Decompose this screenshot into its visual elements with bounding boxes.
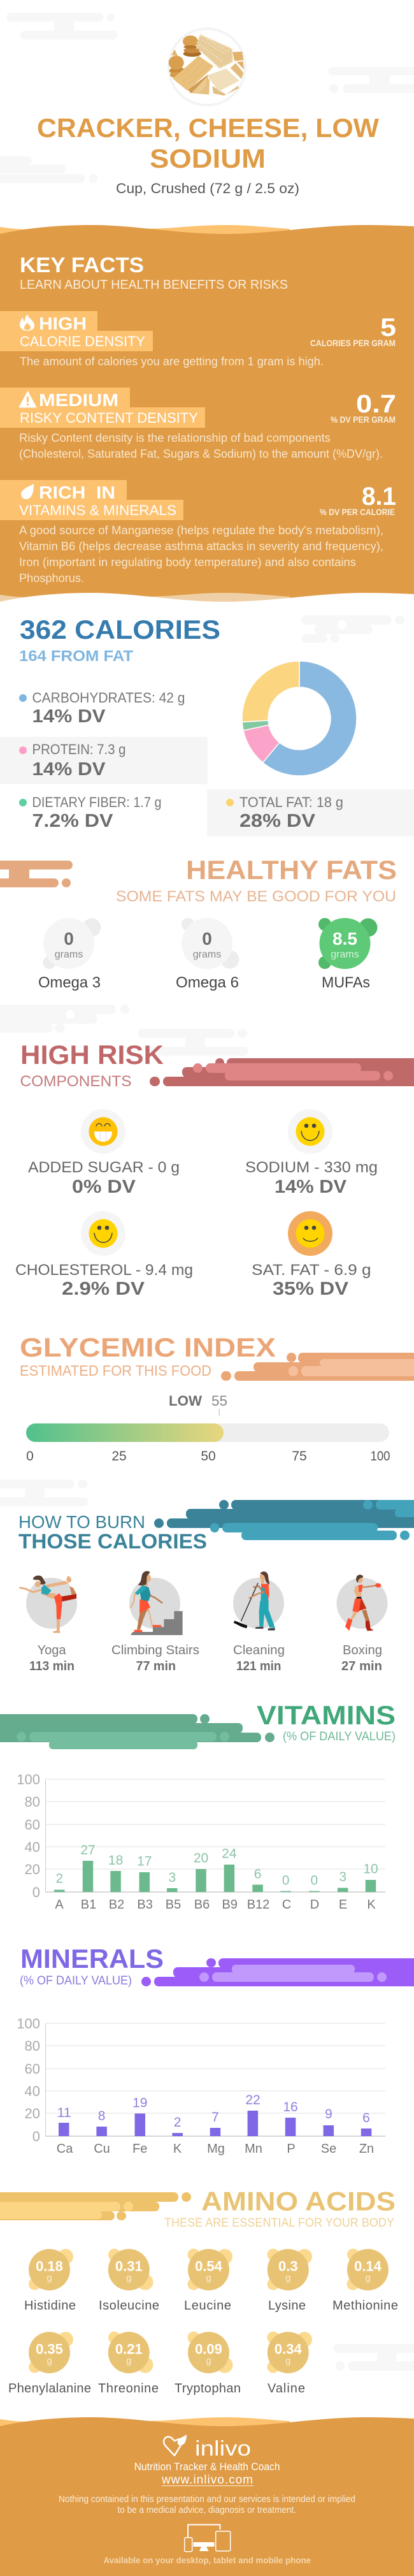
disclaimer — [59, 2494, 355, 2515]
subheading: essential: THESE ARE ESSENTIAL FOR YOUR BODY — [164, 2216, 394, 2230]
risk item: sodium: 14% DV — [275, 1177, 347, 1197]
risk item: cholesterol: 2.9% DV — [62, 1279, 145, 1299]
icon: boxer figure — [345, 1575, 381, 1631]
bar chart: minerals: 6 — [362, 2111, 370, 2125]
bar chart: minerals: 9 — [325, 2107, 332, 2121]
bar chart: vitamins: 2 — [55, 1872, 63, 1886]
amino: tryptophan — [175, 2332, 241, 2396]
bar chart: minerals: 0 — [32, 2128, 40, 2144]
legend: total fat: 28% DV — [239, 811, 316, 831]
legend: total fat: TOTAL FAT: 18 g — [239, 794, 343, 810]
bar chart: vitamins: 0 — [32, 1884, 40, 1900]
panel: vitamins — [0, 1700, 396, 1912]
risk item: sodium: SODIUM - 330 mg — [245, 1159, 378, 1176]
amino: methionine — [332, 2249, 398, 2313]
risk item: added sugar: ADDED SUGAR - 0 g — [28, 1159, 180, 1176]
metric: omega 6: Omega 6 — [176, 974, 239, 991]
legend: protein: 14% DV — [32, 759, 106, 780]
bar chart: minerals: 80 — [25, 2038, 40, 2054]
fact: vitamins and minerals: 8.1 — [362, 483, 396, 511]
tagline: Nutrition Tracker & Health Coach — [134, 2461, 280, 2473]
bar chart: vitamins: 6 — [254, 1867, 261, 1881]
bar chart: vitamins — [17, 1772, 385, 1912]
activity: cleaning: Cleaning — [233, 1643, 285, 1657]
activity: climbing stairs: Climbing Stairs — [111, 1643, 199, 1657]
metric: omega 6: 0 — [202, 929, 212, 949]
disclaimer: to be a medical advice, diagnosis or treatment. — [117, 2505, 296, 2515]
fact: calorie density: 5 — [380, 314, 396, 342]
bar chart: minerals: Mn — [245, 2142, 262, 2156]
panel: glycemic index — [20, 1332, 414, 1464]
activity: cleaning: 121 min — [236, 1659, 282, 1673]
subheading: from fat: 164 FROM FAT — [19, 648, 133, 665]
fact: vitamins and minerals: Vitamin B6 (helps decrease asthma attacks in severity and frequency), — [19, 540, 383, 553]
fact: calorie density: The amount of calories you are getting from 1 gram is high. — [20, 355, 324, 368]
bar chart: minerals: 8 — [98, 2109, 105, 2123]
bar chart: minerals: K — [173, 2142, 182, 2156]
activity: yoga: 113 min — [29, 1659, 75, 1673]
bar chart: vitamins: 20 — [194, 1851, 208, 1866]
amino: leucine — [184, 2249, 232, 2313]
title: SODIUM — [150, 143, 266, 173]
panel: calories — [0, 615, 414, 836]
fact: calorie density: CALORIE DENSITY — [20, 333, 145, 349]
amino: methionine: Methionine — [332, 2299, 398, 2313]
logo: inlivo: inlivo — [195, 2436, 251, 2460]
fact: risky content density: % DV PER GRAM — [331, 414, 396, 425]
risk item: saturated fat: SAT. FAT - 6.9 g — [252, 1262, 371, 1279]
bar chart: vitamins: B3 — [137, 1898, 153, 1912]
activity: boxing — [336, 1575, 387, 1673]
gauge axis labels: 100 — [371, 1449, 390, 1464]
banner: healthy fats stripes — [0, 861, 73, 887]
fact: risky content density: Risky Content density is the relationship of bad components — [19, 432, 331, 444]
fact: calorie density: HIGH — [39, 314, 87, 333]
icon: yoga figure — [20, 1576, 77, 1633]
amino: isoleucine: Isoleucine — [99, 2299, 159, 2313]
bar chart: vitamins: B6 — [194, 1898, 210, 1912]
banner: amino stripes — [0, 2192, 191, 2220]
fact: risky content density: 0.7 — [356, 390, 396, 418]
fact: vitamins and minerals — [0, 480, 396, 585]
amino: threonine: Threonine — [98, 2382, 159, 2396]
logo: inlivo — [164, 2434, 251, 2460]
bar chart: vitamins: 3 — [339, 1870, 346, 1884]
title: CRACKER, CHEESE, LOW — [37, 113, 379, 143]
bar chart: vitamins: 0 — [282, 1873, 289, 1888]
bar chart: minerals: 11 — [57, 2106, 71, 2120]
bar chart: minerals: 20 — [25, 2106, 40, 2121]
activity: boxing: 27 min — [341, 1659, 382, 1673]
fact: vitamins and minerals: A good source of Manganese (helps regulate the body's metabolism), — [19, 524, 383, 537]
bar chart: minerals — [17, 2016, 385, 2156]
legend: total fat — [226, 794, 343, 831]
gauge value: 55 — [211, 1393, 227, 1409]
bar chart: vitamins: 27 — [80, 1843, 96, 1858]
bar chart: minerals: 40 — [25, 2083, 40, 2099]
activity: yoga — [20, 1576, 77, 1673]
amino: histidine: g — [46, 2273, 52, 2283]
legend: dietary fiber: DIETARY FIBER: 1.7 g — [32, 794, 162, 810]
heading: amino acids: AMINO ACIDS — [201, 2187, 396, 2216]
activity: climbing stairs: 77 min — [136, 1659, 176, 1673]
banner: glycemic stripes — [221, 1353, 414, 1381]
metric: omega 3: grams — [55, 949, 83, 960]
bar chart: vitamins: 100 — [17, 1772, 40, 1787]
heading: how to burn: HOW TO BURN — [18, 1512, 145, 1532]
metric: omega 3: 0 — [64, 929, 74, 949]
gauge bar — [26, 1423, 389, 1442]
panel: minerals — [17, 1944, 414, 2156]
metric: MUFAs: grams — [331, 949, 359, 960]
metric: omega 6 — [176, 918, 239, 991]
bar chart: vitamins: B2 — [109, 1898, 124, 1912]
amino: threonine — [98, 2332, 159, 2396]
amino: lysine: 0.3 — [278, 2258, 298, 2274]
gauge axis labels: 25 — [111, 1449, 127, 1464]
heading: glycemic index: GLYCEMIC INDEX — [20, 1332, 276, 1362]
amino: valine: Valine — [268, 2382, 305, 2396]
banner: vitamins stripes — [0, 1714, 275, 1749]
legend: protein: PROTEIN: 7.3 g — [32, 741, 126, 757]
amino: leucine: Leucine — [184, 2299, 231, 2313]
bar chart: minerals: 7 — [211, 2110, 219, 2125]
amino: phenylalanine: g — [46, 2355, 52, 2366]
bar chart: minerals: Zn — [359, 2142, 374, 2156]
icon: flame — [20, 314, 34, 331]
bar chart: minerals: 60 — [25, 2061, 40, 2077]
bar chart: minerals: Se — [321, 2142, 336, 2156]
amino: histidine: Histidine — [24, 2299, 76, 2313]
subheading: percent daily value: (% OF DAILY VALUE) — [20, 1974, 132, 1988]
risk item: sodium — [245, 1109, 378, 1197]
icon: leaf — [21, 484, 34, 499]
legend: dietary fiber: 7.2% DV — [32, 811, 113, 831]
amino: leucine: g — [206, 2273, 211, 2283]
amino: threonine: g — [126, 2355, 131, 2366]
bar chart: vitamins: 18 — [108, 1853, 123, 1868]
heading: vitamins: VITAMINS — [257, 1700, 396, 1730]
risk item: saturated fat: 35% DV — [273, 1279, 349, 1299]
icon: stairs figure — [131, 1571, 183, 1635]
bar chart: vitamins: B5 — [166, 1898, 181, 1912]
amino: methionine: g — [365, 2273, 371, 2283]
bar chart: minerals: Fe — [132, 2142, 147, 2156]
bar chart: vitamins: E — [339, 1898, 347, 1912]
fact: risky content density: MEDIUM — [39, 390, 118, 410]
banner: teal stripes — [154, 1500, 414, 1540]
amino: tryptophan: Tryptophan — [175, 2382, 241, 2396]
bar chart: vitamins: B12 — [247, 1898, 269, 1912]
bar chart: vitamins: 40 — [25, 1839, 40, 1855]
subheading: healthy fats: SOME FATS MAY BE GOOD FOR YOU — [116, 888, 396, 905]
subheading: LEARN ABOUT HEALTH BENEFITS OR RISKS — [20, 278, 288, 292]
legend: carbohydrates: CARBOHYDRATES: 42 g — [32, 690, 185, 706]
heading: high risk: HIGH RISK — [20, 1040, 164, 1070]
amino: phenylalanine: 0.35 — [36, 2341, 63, 2357]
bar chart: minerals: 22 — [245, 2093, 261, 2107]
risk item: cholesterol: CHOLESTEROL - 9.4 mg — [15, 1262, 193, 1279]
amino: threonine: 0.21 — [115, 2341, 143, 2357]
fact: vitamins and minerals: % DV PER CALORIE — [320, 507, 395, 517]
amino: valine: g — [285, 2355, 290, 2366]
bar chart: minerals: 2 — [174, 2115, 181, 2130]
amino: isoleucine — [99, 2249, 159, 2313]
amino: valine — [268, 2332, 312, 2396]
panel: how to burn calories — [18, 1500, 414, 1673]
bar chart: minerals: Mg — [207, 2142, 225, 2156]
bar chart: minerals: P — [287, 2142, 296, 2156]
amino: lysine: g — [285, 2273, 290, 2283]
bar chart: vitamins: K — [367, 1898, 376, 1912]
fact: vitamins and minerals: VITAMINS & MINERALS — [19, 502, 176, 518]
metric: omega 6: grams — [193, 949, 221, 960]
heading: those calories: THOSE CALORIES — [18, 1530, 207, 1553]
panel: key facts — [0, 225, 414, 610]
amino: histidine: 0.18 — [36, 2258, 63, 2274]
gauge axis labels: 50 — [201, 1449, 216, 1464]
subheading: components: COMPONENTS — [20, 1073, 131, 1090]
banner: minerals stripes — [141, 1958, 414, 1986]
gauge value — [169, 1393, 227, 1416]
subheading: estimated: ESTIMATED FOR THIS FOOD — [20, 1362, 211, 1379]
website link: www.inlivo.com — [161, 2473, 253, 2487]
banner: high risk stripes — [150, 1058, 414, 1086]
title — [37, 113, 379, 173]
bar chart: minerals: 16 — [283, 2100, 298, 2114]
heading: key facts: KEY FACTS — [20, 253, 144, 277]
disclaimer: Nothing contained in this presentation and our services is intended or implied — [59, 2494, 355, 2505]
bar chart: minerals: Ca — [57, 2142, 73, 2156]
legend: carbohydrates — [19, 690, 185, 727]
gauge axis labels: 0 — [26, 1449, 34, 1464]
serving size: Cup, Crushed (72 g / 2.5 oz) — [116, 180, 299, 196]
panel: high risk components — [15, 1040, 414, 1299]
subheading: percent daily value: (% OF DAILY VALUE) — [283, 1730, 396, 1743]
legend: protein — [19, 741, 126, 780]
icon: sweeping figure — [234, 1571, 275, 1631]
food photo: crackers — [169, 29, 245, 105]
bar chart: vitamins: B1 — [81, 1898, 96, 1912]
legend: dietary fiber — [19, 794, 162, 831]
heading: calories: 362 CALORIES — [20, 615, 220, 644]
metric: omega 3 — [38, 918, 101, 991]
bar chart: vitamins: 17 — [137, 1854, 152, 1869]
bar chart: minerals: Cu — [94, 2142, 110, 2156]
amino: histidine — [24, 2249, 76, 2313]
icon: grinning face — [89, 1117, 117, 1146]
amino: valine: 0.34 — [275, 2341, 302, 2357]
heading: healthy fats: HEALTHY FATS — [186, 855, 397, 885]
bar chart: vitamins: 60 — [25, 1817, 40, 1833]
donut chart — [242, 661, 357, 776]
bar chart: vitamins: 0 — [311, 1873, 318, 1888]
risk item: added sugar: 0% DV — [72, 1177, 136, 1197]
activity: yoga: Yoga — [38, 1643, 66, 1657]
amino: tryptophan: 0.09 — [195, 2341, 222, 2357]
metric: MUFAs — [318, 918, 377, 991]
fact: vitamins and minerals: RICH IN — [39, 483, 115, 502]
risk item: added sugar — [28, 1109, 180, 1197]
legend: carbohydrates: 14% DV — [32, 706, 106, 727]
metric: MUFAs: 8.5 — [332, 929, 357, 949]
fact: risky content density — [0, 388, 396, 460]
icon: mild smiling face — [296, 1219, 325, 1248]
amino: leucine: 0.54 — [195, 2258, 223, 2274]
icon: devices — [185, 2524, 231, 2552]
amino: methionine: 0.14 — [354, 2258, 382, 2274]
bar chart: vitamins: A — [55, 1898, 64, 1912]
availability note: Available on your desktop, tablet and mobile phone — [103, 2555, 311, 2565]
bar chart: minerals: 100 — [17, 2016, 40, 2032]
bar chart: vitamins: 20 — [25, 1861, 40, 1877]
activity: boxing: Boxing — [343, 1643, 382, 1657]
metric: omega 3: Omega 3 — [38, 974, 101, 991]
amino: isoleucine: g — [126, 2273, 131, 2283]
fact: vitamins and minerals: Iron (important in regulating body temperature) and also contains — [19, 556, 356, 569]
bar chart: vitamins: 24 — [222, 1846, 237, 1861]
bar chart: vitamins: 80 — [25, 1794, 40, 1810]
bar chart: vitamins: B9 — [222, 1898, 238, 1912]
footer — [0, 2417, 414, 2576]
fact: calorie density — [0, 311, 396, 368]
risk item: saturated fat — [252, 1211, 371, 1299]
activity: cleaning — [233, 1571, 285, 1673]
amino: lysine — [268, 2249, 312, 2313]
gauge value: LOW — [169, 1393, 202, 1409]
panel: healthy fats — [0, 855, 397, 991]
panel: amino acids — [0, 2187, 398, 2396]
risk item: cholesterol — [15, 1211, 193, 1299]
icon: warning triangle — [19, 391, 36, 407]
amino: lysine: Lysine — [268, 2299, 306, 2313]
bar chart: minerals: 19 — [132, 2096, 147, 2111]
activity: climbing stairs — [111, 1571, 199, 1673]
amino: phenylalanine: Phenylalanine — [8, 2382, 91, 2396]
icon: smiling face — [89, 1219, 117, 1248]
bar chart: vitamins: 3 — [168, 1870, 176, 1885]
fact: risky content density: RISKY CONTENT DENSITY — [20, 410, 198, 426]
fact: calorie density: CALORIES PER GRAM — [310, 338, 396, 348]
metric: MUFAs: MUFAs — [322, 974, 370, 991]
amino: isoleucine: 0.31 — [115, 2258, 143, 2274]
fact: vitamins and minerals: Phosphorus. — [19, 572, 84, 585]
gauge axis labels: 75 — [292, 1449, 307, 1464]
bar chart: vitamins: C — [282, 1898, 291, 1912]
gauge axis labels — [26, 1449, 390, 1464]
amino: phenylalanine — [8, 2332, 91, 2396]
amino: tryptophan: g — [206, 2355, 211, 2366]
bar chart: vitamins: D — [310, 1898, 319, 1912]
fact: risky content density: (Cholesterol, Saturated Fat, Sugars & Sodium) to the amount (%DV/gr). — [19, 448, 383, 460]
heading: minerals: MINERALS — [20, 1944, 164, 1974]
bar chart: vitamins: 10 — [363, 1861, 378, 1877]
icon: smiling face — [296, 1117, 325, 1146]
